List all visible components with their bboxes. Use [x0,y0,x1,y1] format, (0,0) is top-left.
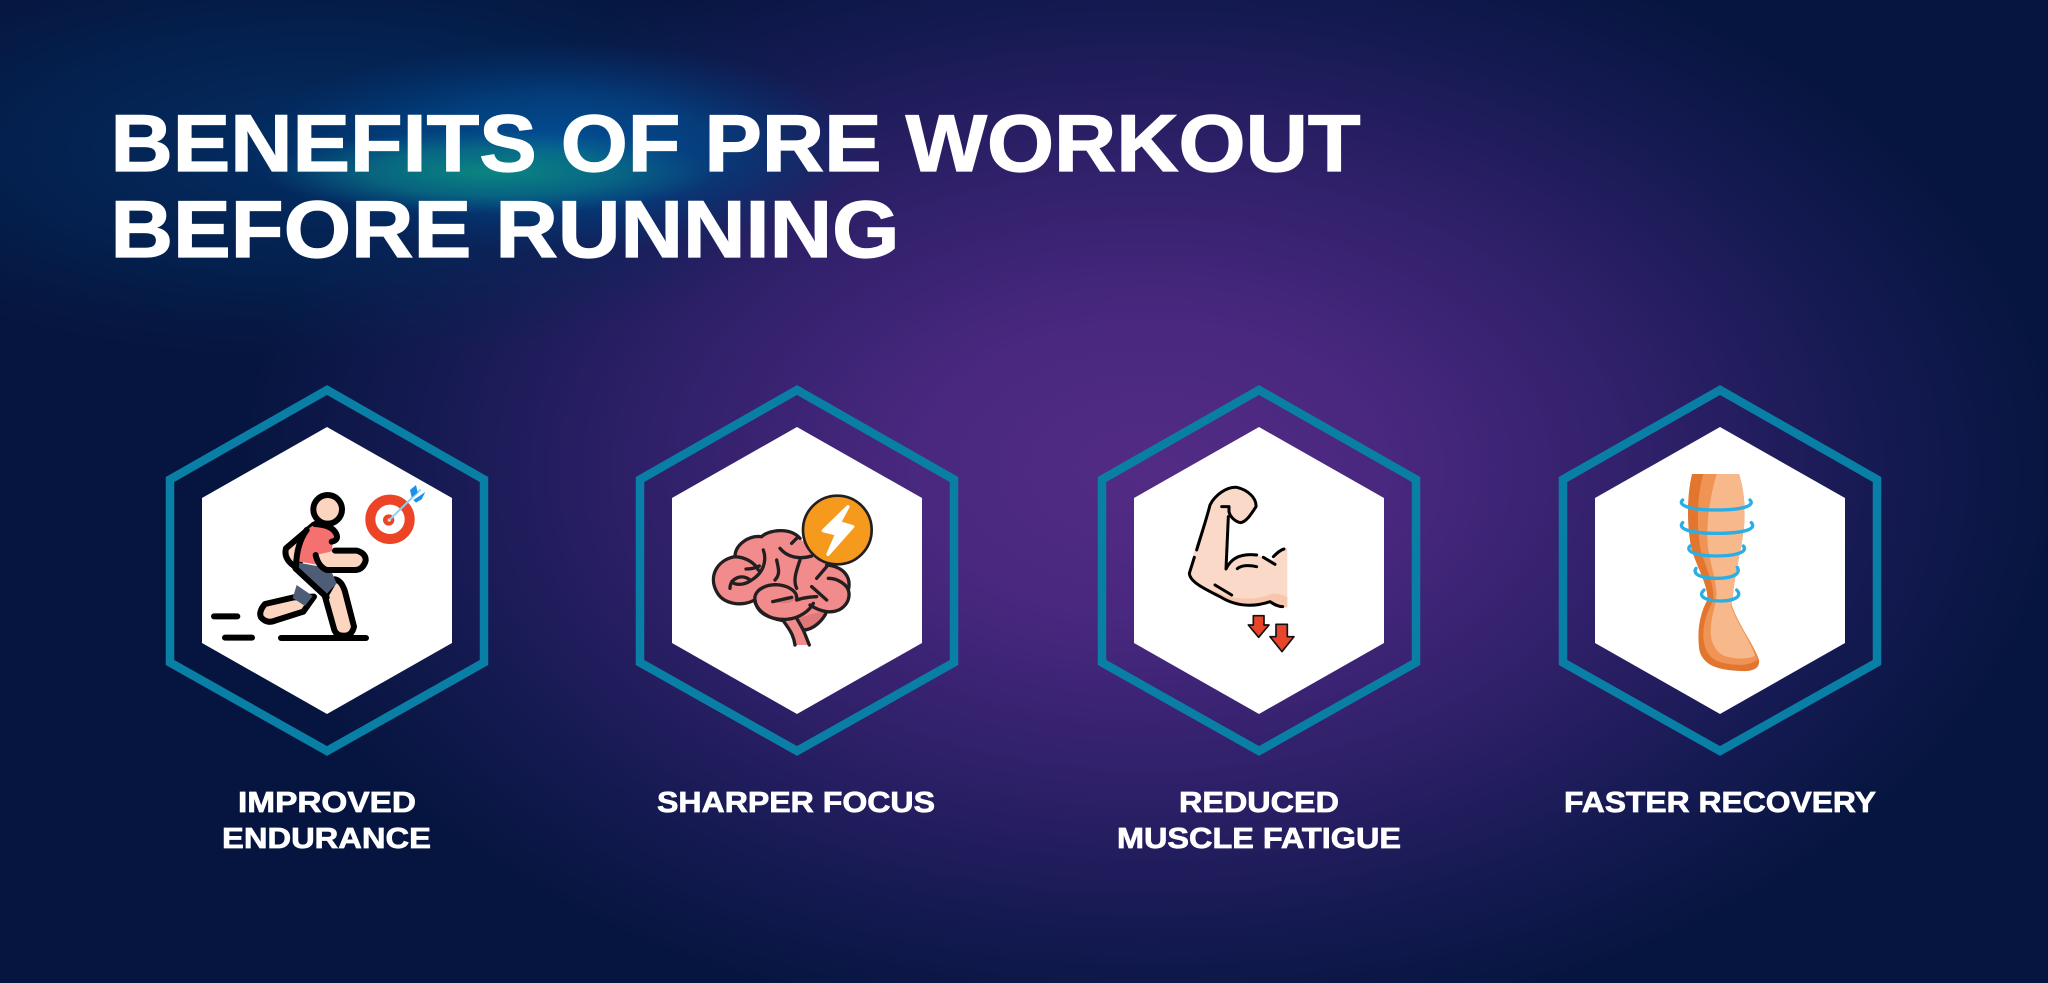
panel: faster recovery [1563,390,1877,819]
label: FASTER RECOVERY [1564,787,1876,819]
white hexagon [202,427,452,714]
hexagon frame [170,390,484,751]
label: MUSCLE FATIGUE [1117,823,1401,855]
title [110,99,1360,275]
icon: brain with lightning [713,496,872,645]
icon: runner with target [214,485,425,638]
title: BENEFITS OF PRE WORKOUT [110,99,1360,189]
white hexagon [672,427,922,714]
label [1117,787,1401,855]
icon: leg with compression rings [1681,474,1759,671]
label: SHARPER FOCUS [657,787,935,819]
white hexagon [1134,427,1384,714]
panel: improved endurance [170,390,484,855]
white hexagon [1595,427,1845,714]
label [222,787,431,855]
hexagon frame [1563,390,1877,751]
label: REDUCED [1179,787,1339,819]
panel: sharper focus [640,390,954,819]
hexagon frame [640,390,954,751]
panel: reduced muscle fatigue [1102,390,1416,855]
icon: flexed arm with down arrows [1189,487,1294,652]
title: BEFORE RUNNING [110,185,900,275]
label: IMPROVED [238,787,416,819]
label: ENDURANCE [222,823,431,855]
hexagon frame [1102,390,1416,751]
